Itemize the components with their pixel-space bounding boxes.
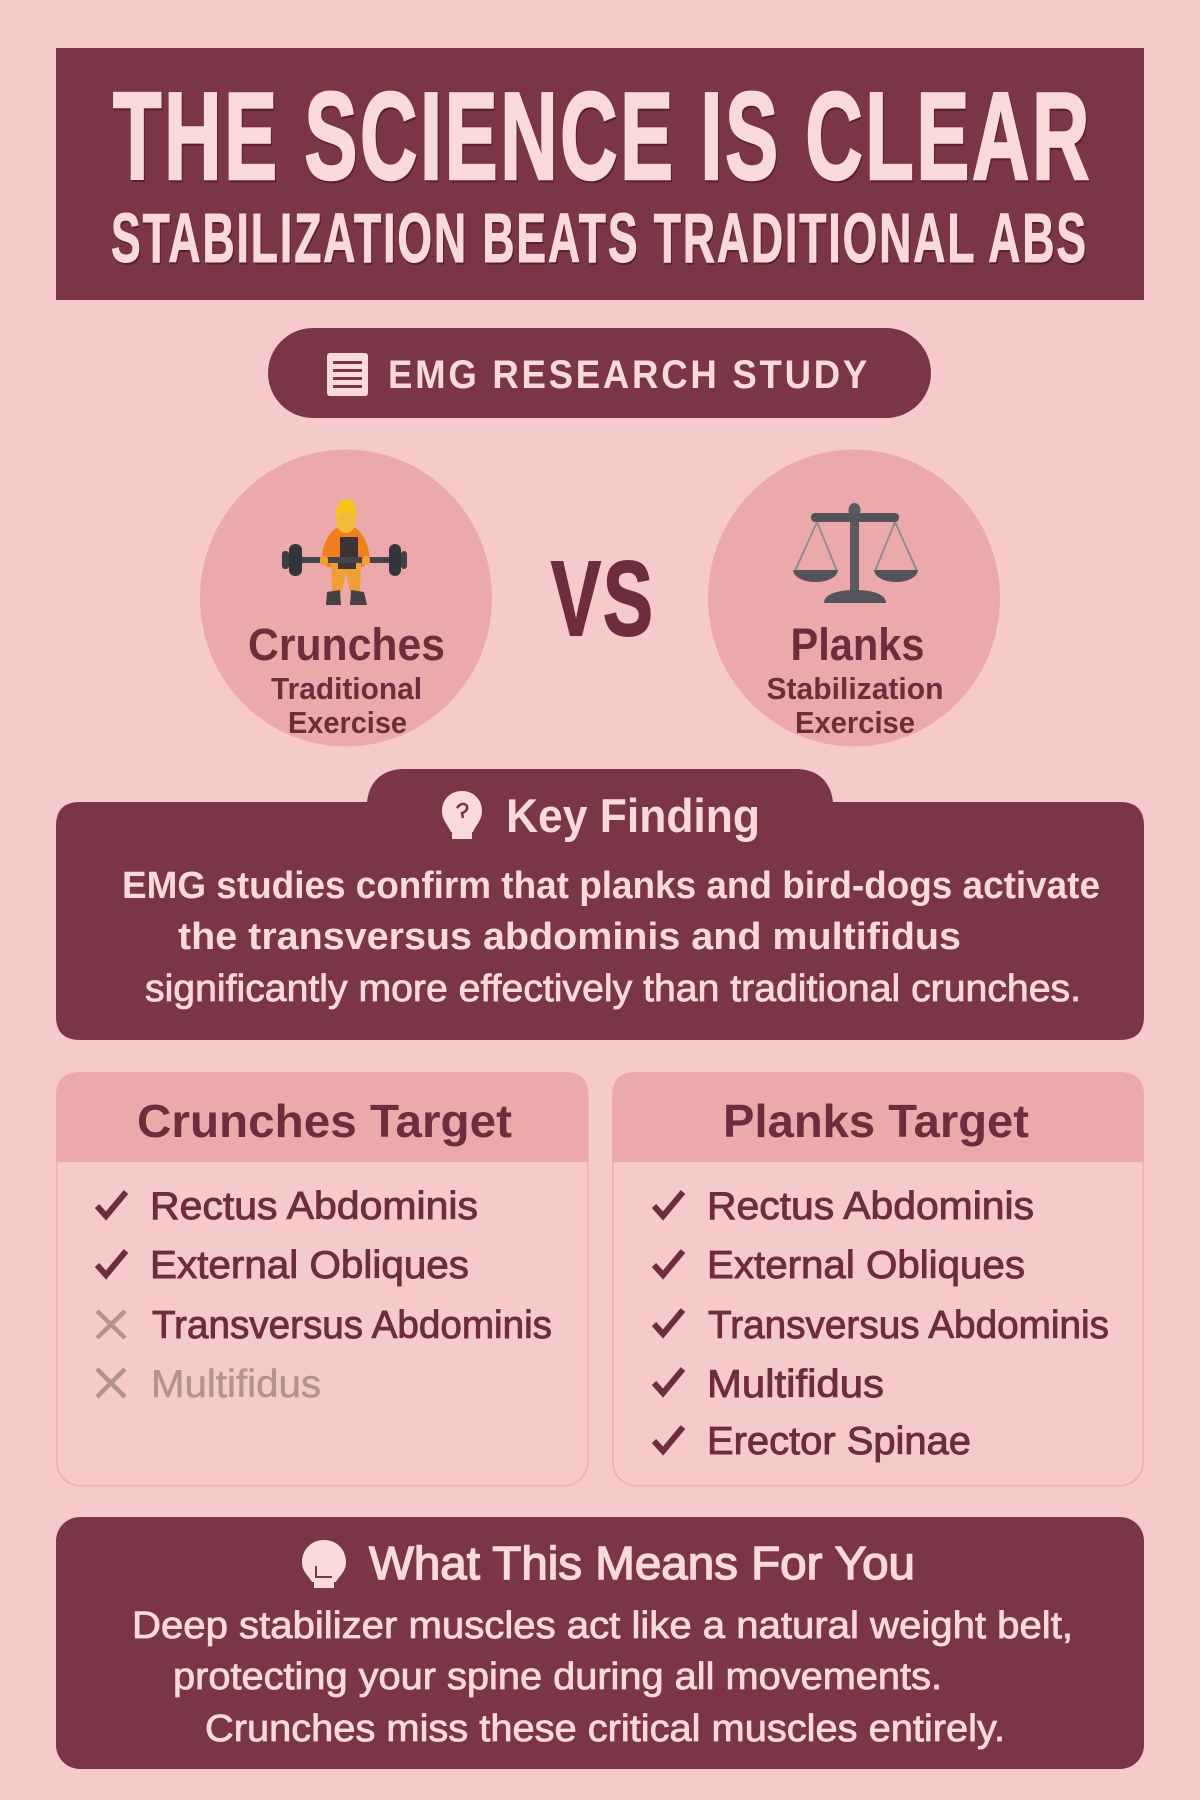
explanation text — [132, 1605, 1073, 1750]
icon: light bulb — [302, 1540, 346, 1588]
label: stabilization exercise — [766, 671, 944, 740]
explanation text: Crunches miss these critical muscles entirely. — [205, 1708, 1005, 1750]
heading: key finding: Key Finding — [506, 789, 760, 842]
list: crunches muscles — [97, 1185, 552, 1406]
finding text: EMG studies confirm that planks and bird-dogs activate — [122, 865, 1100, 907]
finding text — [122, 865, 1100, 1010]
label: crunches: Crunches — [248, 619, 445, 670]
cross icon — [97, 1311, 125, 1338]
label: traditional exercise: Traditional — [271, 671, 422, 706]
title banner — [56, 48, 1144, 300]
cross icon — [97, 1369, 125, 1397]
finding text: significantly more effectively than traditional crunches. — [145, 968, 1081, 1010]
label: traditional exercise — [271, 671, 422, 740]
icon: light bulb — [442, 791, 482, 839]
heading: crunches target: Crunches Target — [137, 1095, 512, 1147]
panel: crunches target — [56, 1072, 589, 1486]
panel: what this means for you — [56, 1517, 1144, 1769]
check icon — [97, 1251, 126, 1275]
list: crunches muscles: Transversus Abdominis — [152, 1304, 552, 1347]
label: stabilization exercise: Exercise — [795, 705, 915, 740]
list: planks muscles: Erector Spinae — [707, 1420, 971, 1463]
check icon — [654, 1427, 683, 1451]
badge: EMG research study — [268, 328, 931, 418]
label: stabilization exercise: Stabilization — [766, 671, 944, 706]
list: crunches muscles: External Obliques — [150, 1244, 469, 1287]
explanation text: protecting your spine during all movements. — [173, 1656, 942, 1698]
list: planks muscles: Transversus Abdominis — [708, 1304, 1109, 1347]
panel: crunches circle — [200, 450, 492, 746]
card header — [612, 1072, 1144, 1162]
list: planks muscles — [654, 1185, 1109, 1463]
list: planks muscles: Rectus Abdominis — [707, 1185, 1034, 1228]
icon: weightlifter — [282, 499, 407, 605]
card header — [56, 1072, 589, 1162]
panel: key finding — [56, 769, 1144, 1040]
finding text: the transversus abdominis and multifidus — [178, 916, 961, 958]
heading: what this means: What This Means For You — [369, 1537, 915, 1589]
panel: planks target — [612, 1072, 1144, 1486]
check icon — [97, 1192, 126, 1216]
list: planks muscles: Multifidus — [707, 1363, 884, 1406]
check icon — [654, 1369, 683, 1393]
label: planks: Planks — [790, 619, 924, 670]
check icon — [654, 1192, 683, 1216]
check icon — [654, 1251, 683, 1275]
list: crunches muscles: Multifidus — [151, 1363, 321, 1406]
panel: planks circle — [708, 450, 1000, 746]
VS label: VS — [551, 540, 655, 658]
heading: planks target: Planks Target — [723, 1095, 1029, 1147]
icon: document — [327, 353, 368, 396]
list: planks muscles: External Obliques — [707, 1244, 1025, 1287]
check icon — [654, 1310, 683, 1334]
list: crunches muscles: Rectus Abdominis — [150, 1185, 478, 1228]
icon: balance scales — [793, 503, 918, 603]
explanation text: Deep stabilizer muscles act like a natural weight belt, — [132, 1605, 1073, 1647]
badge label: EMG RESEARCH STUDY — [388, 353, 870, 397]
label: traditional exercise: Exercise — [288, 705, 407, 740]
